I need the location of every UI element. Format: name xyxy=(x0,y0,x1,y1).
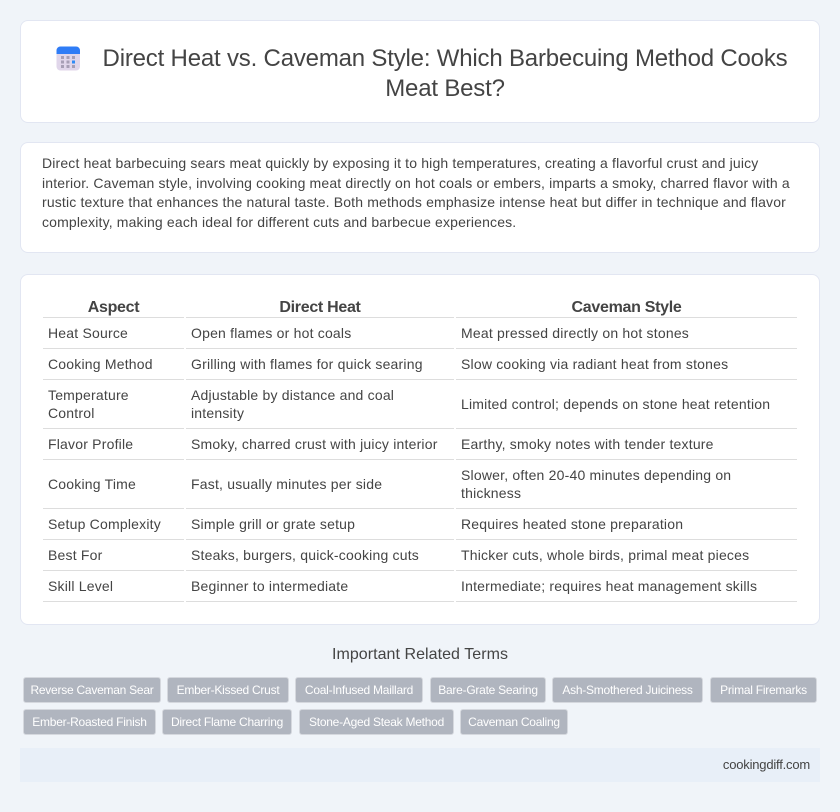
comparison table: Setup Complexity xyxy=(48,516,161,532)
intro text: interior. Caveman style, involving cooking meat directly on hot coals or embers, imparts a smoky, charred flavor with a xyxy=(42,174,790,190)
comparison table: Best For xyxy=(48,547,103,563)
comparison table: Caveman Style xyxy=(572,299,681,316)
chip xyxy=(23,677,161,703)
comparison table: intensity xyxy=(191,405,244,421)
comparison table: Heat Source xyxy=(48,325,128,341)
chip: Ember-Kissed Crust xyxy=(177,683,279,697)
comparison table: Smoky, charred crust with juicy interior xyxy=(191,436,438,452)
chip: Bare-Grate Searing xyxy=(438,683,538,697)
chip xyxy=(295,677,423,703)
comparison table: Intermediate; requires heat management skills xyxy=(461,578,757,594)
panel: comparison table xyxy=(20,274,820,625)
icon: calendar xyxy=(56,46,80,70)
heading: related terms: Important Related Terms xyxy=(332,646,508,663)
intro text: rustic texture that enhances the natural taste. Both methods emphasize intense heat but differ in technique and flavor xyxy=(42,194,786,210)
comparison table: thickness xyxy=(461,485,521,501)
chip xyxy=(460,709,568,735)
comparison table: Flavor Profile xyxy=(48,436,133,452)
chip xyxy=(299,709,454,735)
comparison table: Temperature xyxy=(48,387,129,403)
comparison table: Thicker cuts, whole birds, primal meat pieces xyxy=(461,547,749,563)
comparison table: Earthy, smoky notes with tender texture xyxy=(461,436,714,452)
comparison table: Slow cooking via radiant heat from stones xyxy=(461,356,728,372)
comparison table: Aspect xyxy=(88,299,139,316)
chip: Coal-Infused Maillard xyxy=(305,683,413,697)
comparison table: Cooking Time xyxy=(48,476,136,492)
title xyxy=(103,45,787,102)
chip: Caveman Coaling xyxy=(468,715,560,729)
intro text: Direct heat barbecuing sears meat quickly by exposing it to high temperatures, creating a flavorful crust and juicy xyxy=(42,155,758,171)
comparison table: Limited control; depends on stone heat retention xyxy=(461,396,770,412)
title: Direct Heat vs. Caveman Style: Which Barbecuing Method Cooks xyxy=(103,45,787,72)
comparison table: Slower, often 20-40 minutes depending on xyxy=(461,467,731,483)
comparison table: Grilling with flames for quick searing xyxy=(191,356,423,372)
chip xyxy=(167,677,289,703)
panel: header xyxy=(20,20,820,123)
intro text: complexity, making each ideal for different cuts and barbecue experiences. xyxy=(42,214,516,230)
comparison table: Skill Level xyxy=(48,578,113,594)
chip: Ash-Smothered Juiciness xyxy=(562,683,693,697)
comparison table: Control xyxy=(48,405,95,421)
chip xyxy=(23,709,156,735)
term chips xyxy=(23,677,817,735)
chip: Direct Flame Charring xyxy=(171,715,283,729)
footer source: cookingdiff.com xyxy=(723,757,810,772)
comparison table: Cooking Method xyxy=(48,356,153,372)
comparison table: Requires heated stone preparation xyxy=(461,516,683,532)
chip: Ember-Roasted Finish xyxy=(32,715,147,729)
chip xyxy=(710,677,817,703)
footer xyxy=(20,748,820,782)
chip xyxy=(430,677,546,703)
comparison table: Simple grill or grate setup xyxy=(191,516,355,532)
panel: intro xyxy=(20,142,820,253)
chip: Reverse Caveman Sear xyxy=(30,683,154,697)
comparison table: Beginner to intermediate xyxy=(191,578,348,594)
intro text xyxy=(42,155,790,230)
comparison table: Fast, usually minutes per side xyxy=(191,476,382,492)
comparison table: Steaks, burgers, quick-cooking cuts xyxy=(191,547,419,563)
chip xyxy=(162,709,292,735)
chip: Primal Firemarks xyxy=(720,683,807,697)
comparison table: Direct Heat xyxy=(279,299,361,316)
chip: Stone-Aged Steak Method xyxy=(309,715,444,729)
comparison table: Open flames or hot coals xyxy=(191,325,351,341)
comparison table xyxy=(43,299,797,602)
comparison table: Adjustable by distance and coal xyxy=(191,387,394,403)
comparison table: Meat pressed directly on hot stones xyxy=(461,325,689,341)
chip xyxy=(552,677,703,703)
title: Meat Best? xyxy=(385,75,505,102)
